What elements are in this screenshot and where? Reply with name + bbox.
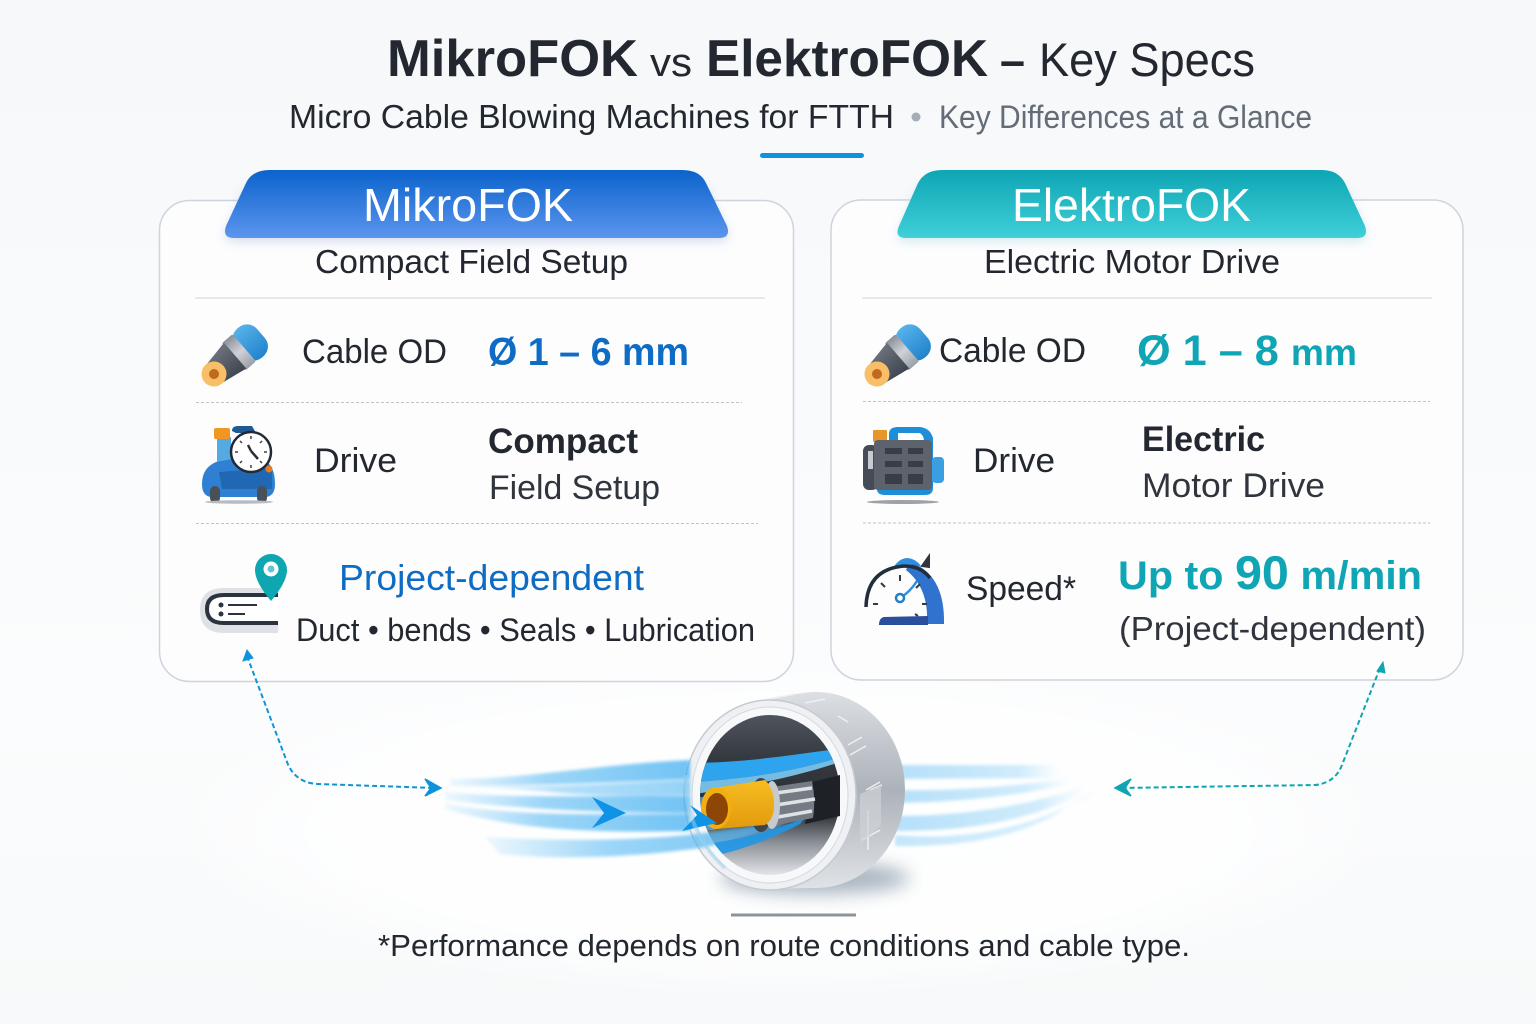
subtitle: Micro Cable Blowing Machines for FTTH <box>289 98 894 135</box>
icon: electric motor <box>863 427 944 504</box>
icon: route with location pin <box>200 554 287 633</box>
title: vs <box>650 41 692 85</box>
tab: ElektroFOK: ElektroFOK <box>1012 179 1251 231</box>
value: Electric Motor Drive: Motor Drive <box>1142 467 1325 505</box>
value: Compact Field Setup: Compact <box>488 422 638 461</box>
value: Electric Motor Drive <box>1142 420 1325 505</box>
flow arrow 2 <box>682 805 717 831</box>
icon: speedometer <box>866 556 944 625</box>
illustration: air-blown duct with cable <box>445 692 1105 894</box>
glass front arc <box>686 775 725 868</box>
panel: MikroFOK <box>160 170 794 682</box>
factors list: Duct • bends • Seals • Lubrication <box>296 612 755 648</box>
title accent line <box>760 153 864 158</box>
value: 1-8 mm: Ø 1 – 8 mm <box>1137 327 1357 375</box>
value: Compact Field Setup: Field Setup <box>489 469 660 507</box>
tab: MikroFOK: MikroFOK <box>363 179 573 231</box>
label: Cable OD: Cable OD <box>939 332 1086 370</box>
value: 1-6 mm: Ø 1 – 6 mm <box>488 331 689 374</box>
subtitle <box>289 98 1312 135</box>
title: ElektroFOK <box>706 30 988 88</box>
duct interior <box>700 715 840 875</box>
title: Key Specs <box>1039 33 1255 86</box>
value: Project-dependent: Project-dependent <box>339 557 644 598</box>
cable core <box>749 775 840 832</box>
label: Speed: Speed* <box>966 570 1076 608</box>
tab: ElektroFOK <box>898 170 1366 238</box>
tab: MikroFOK <box>225 170 728 238</box>
arrow: ElektroFOK to duct <box>1115 662 1385 796</box>
title: MikroFOK <box>387 30 638 88</box>
label: Cable OD: Cable OD <box>302 333 447 371</box>
title: – <box>1000 34 1025 86</box>
yellow micro tube <box>701 780 774 829</box>
value: Electric Motor Drive: Electric <box>1142 420 1265 459</box>
panel subtitle: Compact Field Setup <box>315 243 628 280</box>
footer divider <box>731 914 856 916</box>
duct face ring <box>684 700 856 890</box>
air streams right <box>895 765 1105 846</box>
subtitle: Key Differences at a Glance <box>939 99 1312 135</box>
panel: ElektroFOK <box>831 170 1463 680</box>
arrow: MikroFOK to duct <box>243 650 441 796</box>
air stream inside duct <box>695 750 838 858</box>
icon: cable end <box>855 319 936 397</box>
duct body <box>727 692 905 890</box>
title <box>387 30 1255 88</box>
footnote: *Performance depends on route conditions and cable type. <box>378 928 1190 963</box>
icon: cable end <box>192 319 273 397</box>
value: Compact Field Setup <box>488 422 660 507</box>
flow arrow 1 <box>592 797 626 828</box>
icon: compressor with gauge <box>202 426 275 504</box>
label: Drive: Drive <box>314 442 397 480</box>
panel subtitle: Electric Motor Drive <box>984 243 1280 280</box>
value: Up to 90 m/min: Up to 90 m/min <box>1118 546 1422 599</box>
label: Drive: Drive <box>973 442 1055 480</box>
air streams left <box>445 760 790 857</box>
note: project-dependent: (Project-dependent) <box>1119 610 1426 647</box>
